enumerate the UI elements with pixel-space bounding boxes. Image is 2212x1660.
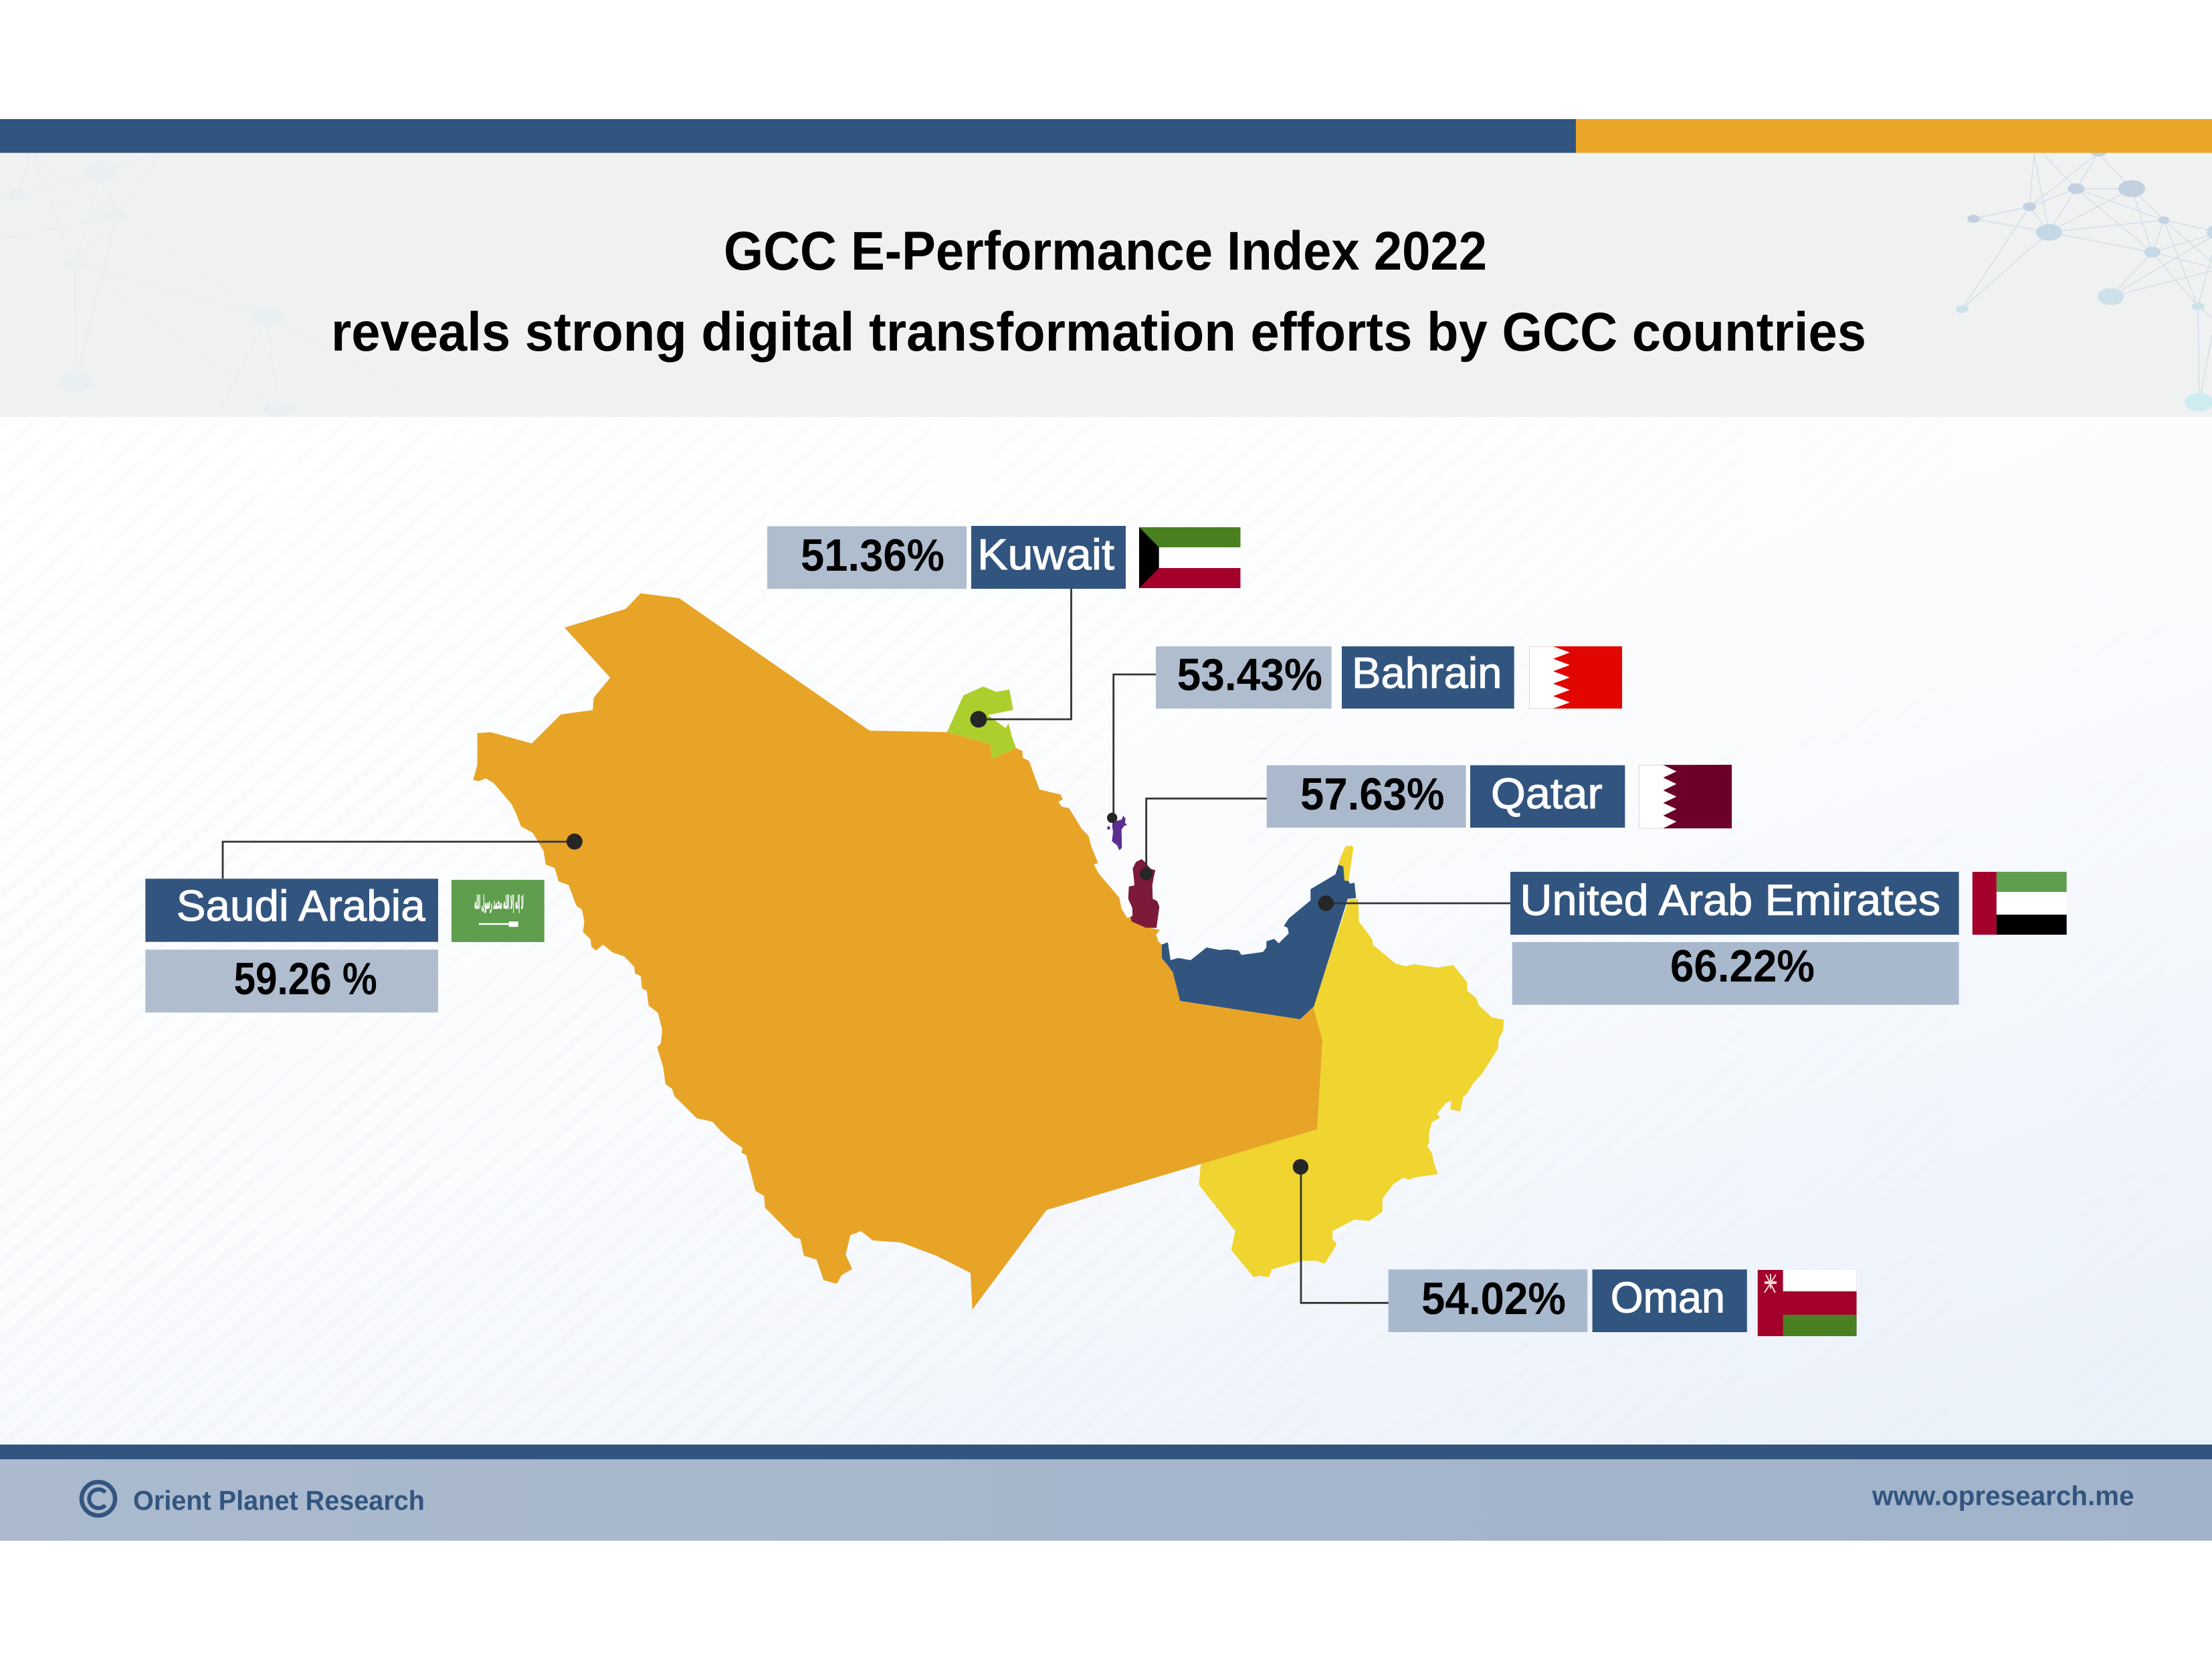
- UAE score: 66.22%: [1670, 941, 1815, 992]
- brand name: Orient Planet Research: [133, 1485, 425, 1516]
- decorative network right: [1956, 146, 2212, 411]
- map: United Arab Emirates: [1162, 864, 1356, 1019]
- map: Bahrain: [1107, 816, 1127, 850]
- Qatar name: Qatar: [1491, 769, 1603, 818]
- UAE score: [1512, 941, 1959, 1005]
- Kuwait name: [971, 526, 1126, 589]
- flag: Bahrain: [1529, 646, 1622, 709]
- flag: United Arab Emirates: [1973, 872, 2067, 935]
- Bahrain leader line: [1107, 674, 1156, 823]
- callout: Saudi Arabia: [145, 834, 583, 1012]
- UAE leader line: [1318, 895, 1510, 911]
- Saudi Arabia name: [145, 879, 438, 942]
- Kuwait score: [767, 526, 967, 589]
- flag: Qatar: [1639, 765, 1732, 828]
- title: [331, 221, 1866, 363]
- map: Oman: [1199, 846, 1504, 1277]
- decorative network left: [0, 152, 428, 417]
- Saudi Arabia score: 59.26 %: [234, 953, 377, 1004]
- icon: copyright: [82, 1482, 115, 1515]
- Kuwait score: 51.36%: [801, 530, 944, 581]
- UAE name: United Arab Emirates: [1520, 875, 1940, 924]
- Qatar leader line: [1140, 799, 1267, 881]
- flag: Saudi Arabia: لا إله إلا الله محمد رسول الله: [474, 892, 524, 913]
- callout: United Arab Emirates: [1318, 872, 2067, 1005]
- header accent bar: [0, 119, 2212, 153]
- map: Kuwait: [947, 686, 1016, 759]
- Oman score: [1389, 1269, 1587, 1332]
- main panel background: [0, 731, 2212, 1445]
- website: www.opresearch.me: [1872, 1480, 2134, 1511]
- Kuwait leader line: [970, 589, 1072, 728]
- title: GCC E-Performance Index 2022: [724, 221, 1487, 282]
- map: Qatar: [1128, 859, 1159, 928]
- Oman name: [1593, 1269, 1747, 1332]
- footer: [0, 1445, 2212, 1541]
- Kuwait name: Kuwait: [977, 530, 1114, 579]
- flag: Kuwait: [1139, 527, 1240, 588]
- callout: Qatar: [1140, 765, 1732, 881]
- Saudi Arabia score: [145, 949, 438, 1012]
- header panel: [0, 146, 2212, 417]
- Bahrain name: Bahrain: [1352, 648, 1502, 697]
- Qatar score: [1267, 765, 1466, 828]
- flag: Oman: [1758, 1270, 1857, 1336]
- Oman name: Oman: [1611, 1273, 1725, 1322]
- Bahrain name: [1342, 646, 1514, 709]
- title: reveals strong digital transformation efforts by GCC countries: [331, 302, 1866, 363]
- map of GCC countries: [473, 593, 1504, 1309]
- callout: Oman: [1293, 1159, 1857, 1336]
- flag: Saudi Arabia: [451, 880, 544, 942]
- Qatar name: [1470, 765, 1625, 828]
- Bahrain score: 53.43%: [1177, 649, 1322, 700]
- map: Saudi Arabia: [473, 593, 1322, 1309]
- Saudi Arabia leader line: [223, 834, 583, 879]
- Qatar score: 57.63%: [1300, 769, 1445, 820]
- Oman leader line: [1293, 1159, 1389, 1303]
- Saudi Arabia name: Saudi Arabia: [177, 881, 426, 930]
- Oman score: 54.02%: [1421, 1273, 1566, 1324]
- callout: Bahrain: [1107, 646, 1622, 823]
- callout: Kuwait: [767, 526, 1240, 728]
